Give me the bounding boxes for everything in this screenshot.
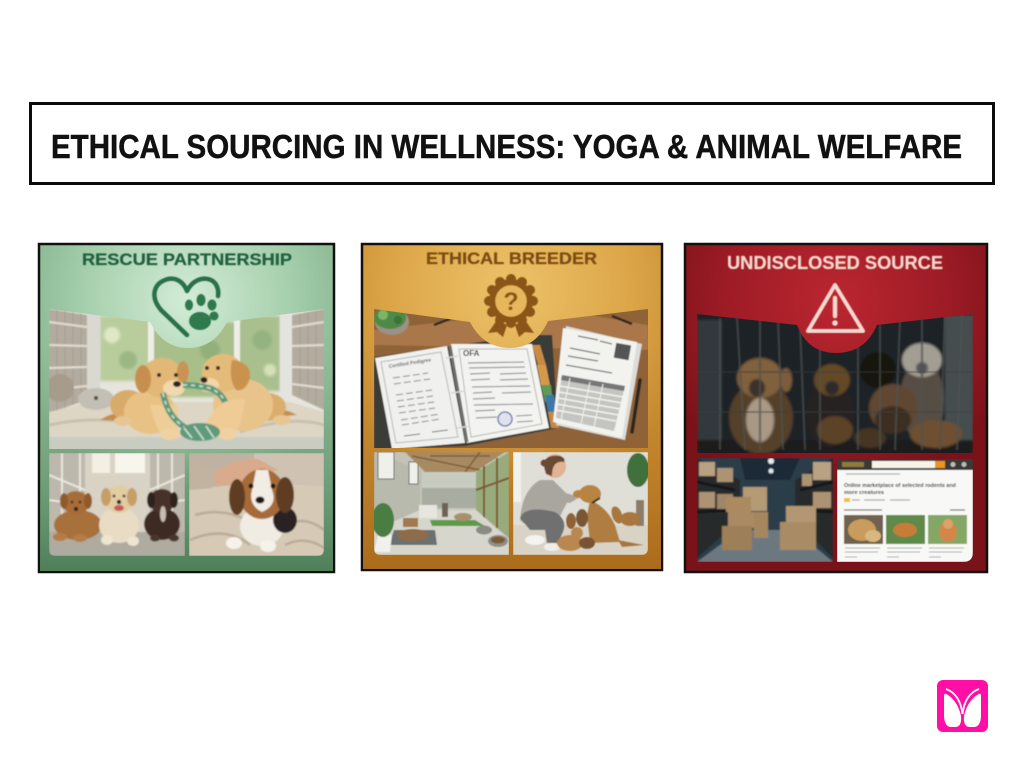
photo: warehouse with boxes [697,458,833,562]
photo: caged dogs [697,310,973,455]
panel: ethical breeder [362,244,662,570]
photo: pedigree binder and records on desk [374,305,649,450]
logo: pink butterfly badge [937,680,988,732]
photo: clean kennel interior [372,452,509,555]
question mark: ? [503,288,519,316]
photo: breeder with dog and puppies [513,452,649,555]
listing subtitle: more creatures [844,490,884,496]
heading: undisclosed source: UNDISCLOSED SOURCE [727,253,943,273]
certificate heading: Certified Pedigree [388,357,432,370]
OFA document label: OFA [463,349,480,358]
icon: certification rosette with question mark [484,274,538,337]
heading: ethical breeder: ETHICAL BREEDER [426,249,597,268]
panel: undisclosed source [685,244,987,572]
photo: beagle puppy being petted [189,453,324,556]
heading: rescue partnership: RESCUE PARTNERSHIP [82,250,292,269]
icon: warning triangle [808,285,863,331]
listing title: Online marketplace of selected rodents and [844,483,956,489]
icon: heart with paw [154,279,218,335]
photo: three puppies in kennel [49,453,185,556]
title banner [30,104,994,184]
photo: online marketplace listing [837,459,973,562]
photo: two puppies with rope in kennel [46,305,324,450]
panel: rescue partnership [39,244,334,572]
